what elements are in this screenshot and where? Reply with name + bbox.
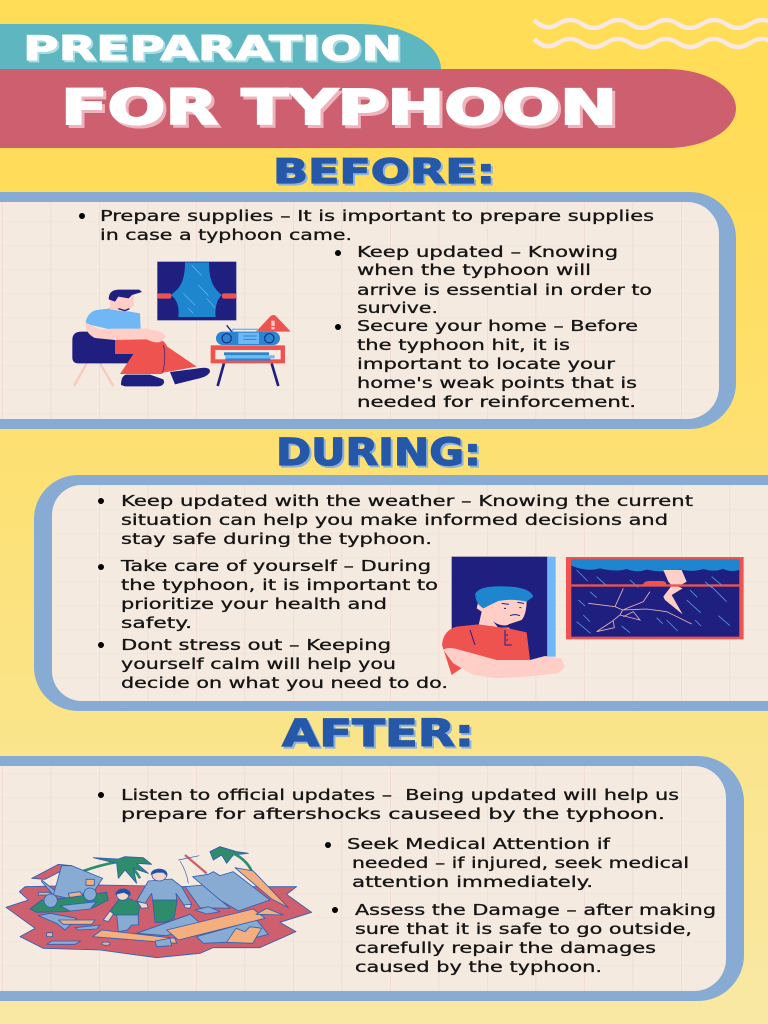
illustration: family walking through typhoon debris [6, 847, 312, 958]
warning sign [256, 315, 291, 332]
text: during bullets [98, 492, 693, 692]
text: before bullets [79, 207, 654, 411]
text: before bullets: in case a typhoon came. [100, 226, 352, 244]
text: after bullets [98, 786, 716, 976]
heading: before: BEFORE: [273, 152, 495, 192]
header banner: preparation [0, 24, 441, 69]
adult [137, 869, 192, 922]
text: before bullets: home's weak points that is [357, 374, 637, 392]
text: before bullets: needed for reinforcement. [357, 393, 636, 411]
wrecked house [32, 864, 103, 898]
text: during bullets: yourself calm will help you [121, 655, 396, 673]
header banner: for typhoon [0, 69, 736, 148]
text: before bullets: survive. [357, 299, 438, 317]
text: after bullets: sure that it is safe to go outside, [355, 920, 692, 938]
text: during bullets: Take care of yourself – During [120, 557, 431, 575]
panel: before [0, 192, 736, 429]
text: after bullets: carefully repair the damages [355, 939, 656, 957]
collapsed building [185, 868, 288, 915]
panel: during [34, 475, 768, 711]
text: during bullets: the typhoon, it is important to [121, 576, 438, 594]
text: after bullets: attention immediately. [352, 873, 593, 891]
text: after bullets: Listen to official updates – Being updated will help us [121, 786, 679, 804]
heading: during: DURING: [276, 431, 481, 474]
illustration: man watching storm beside radio [72, 262, 291, 386]
text: before bullets: when the typhoon will [357, 261, 591, 279]
text: during bullets: safety. [121, 614, 192, 632]
ground [6, 885, 312, 958]
text: before bullets: important to locate your [357, 355, 616, 373]
text: during bullets: situation can help you make informed decisions and [121, 511, 668, 529]
text: during bullets: Keep updated with the weather – Knowing the current [121, 492, 693, 510]
illustration: man at door [442, 557, 565, 678]
panel: after [0, 756, 744, 1001]
text: after bullets: Seek Medical Attention if [347, 835, 611, 853]
text: after bullets: needed – if injured, seek medical [352, 854, 689, 872]
text: before bullets: Secure your home – Before [357, 317, 638, 335]
text: after bullets: Assess the Damage – after making [355, 901, 716, 919]
text: during bullets: decide on what you need to do. [121, 674, 448, 692]
text: during bullets: prioritize your health and [121, 595, 387, 613]
illustration: cracked window with lightning [566, 557, 744, 639]
title line: preparation: PREPARATION [23, 29, 402, 69]
window with curtains [157, 262, 236, 320]
text: during bullets: stay safe during the typhoon. [121, 530, 432, 548]
text: during bullets: Dont stress out – Keeping [121, 636, 391, 654]
heading: after: AFTER: [282, 712, 474, 755]
title line: for typhoon: FOR TYPHOON [61, 80, 617, 136]
text: before bullets: Keep updated – Knowing [357, 243, 618, 261]
man [86, 290, 210, 386]
decorative white waves [534, 20, 768, 47]
text: after bullets: caused by the typhoon. [355, 958, 602, 976]
chair [72, 332, 133, 386]
rubble and planks [38, 909, 268, 947]
table [211, 345, 285, 386]
broken pole [185, 855, 207, 873]
overturned car [30, 888, 108, 912]
child [103, 889, 140, 932]
radio [216, 325, 280, 345]
text: before bullets: arrive is essential in order to [357, 281, 652, 299]
text: before bullets: Prepare supplies – It is important to prepare supplies [100, 207, 654, 225]
text: before bullets: the typhoon hit, it is [357, 336, 570, 354]
text: after bullets: prepare for aftershocks causeed by the typhoon. [121, 805, 665, 823]
palm trees [83, 847, 252, 883]
